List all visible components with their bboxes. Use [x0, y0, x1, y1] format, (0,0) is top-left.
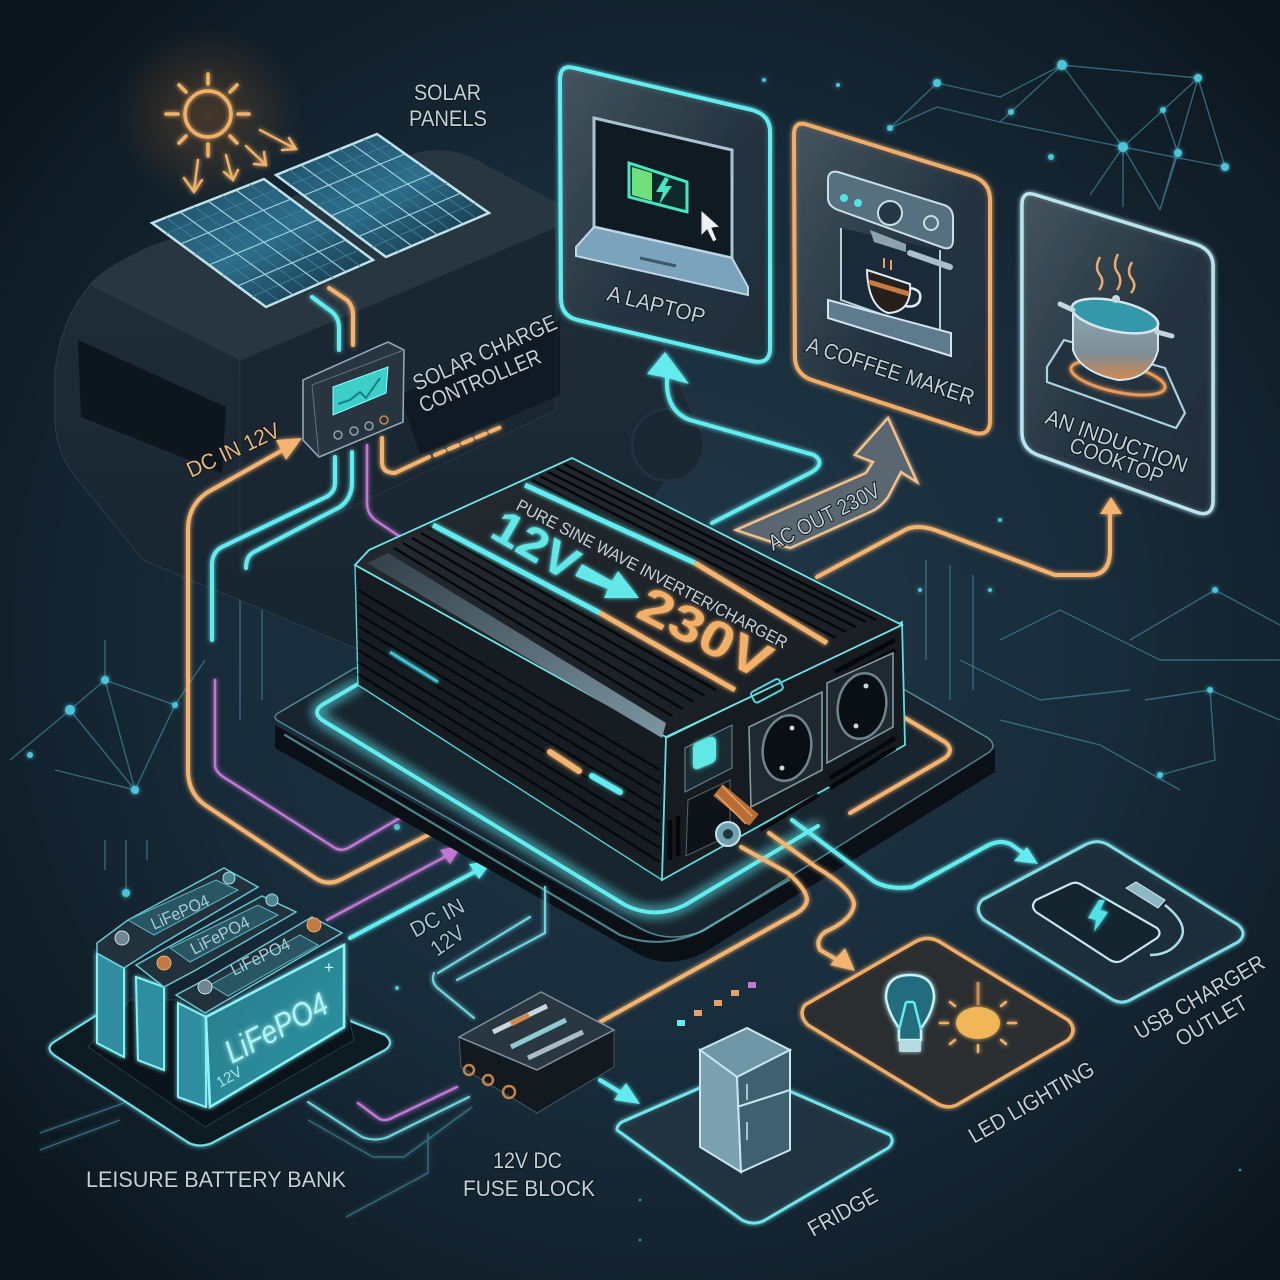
label: DC in 12V (controller): DC IN 12V — [183, 417, 284, 483]
label: 12V DC fuse block: 12V DC — [493, 1148, 562, 1173]
icon: espresso machine — [828, 172, 953, 356]
card: a laptop — [560, 67, 770, 362]
label: solar charge controller: CONTROLLER — [415, 344, 545, 418]
battery top labels: LiFePO4 — [227, 934, 293, 980]
base outer thin outline — [285, 735, 789, 942]
ribs rear band — [532, 464, 876, 638]
sun glow — [113, 25, 303, 205]
status indicator — [750, 678, 784, 704]
DC terminals — [686, 780, 754, 856]
base glow outline: orange — [850, 718, 950, 813]
battery voltage label: 12V — [214, 1063, 245, 1091]
inverter top — [355, 458, 902, 737]
pad: LED lighting — [802, 938, 1073, 1107]
fuse block — [459, 992, 614, 1113]
accent stripes — [433, 525, 600, 613]
inverter unit — [355, 458, 905, 880]
socket right — [827, 653, 893, 763]
label: DC in 12V (battery): DC IN — [406, 893, 469, 942]
power switch — [685, 725, 732, 792]
label: USB charger outlet: OUTLET — [1171, 990, 1252, 1051]
icon: LED spotlight — [940, 982, 1016, 1052]
icon: light bulb — [886, 975, 934, 1052]
solar panels — [152, 134, 489, 307]
van roof — [90, 151, 556, 360]
label: solar panels: PANELS — [409, 106, 487, 131]
vents — [670, 640, 895, 860]
inverter left side — [355, 565, 666, 880]
battery bank — [50, 868, 390, 1146]
card: a laptop: A LAPTOP — [605, 281, 708, 329]
arrow: 12V to 230V — [575, 564, 639, 598]
front battery: + — [324, 958, 334, 977]
arrow: AC out to coffee maker — [736, 418, 917, 548]
inverter base platform — [275, 668, 995, 962]
arrow: AC out to laptop — [647, 352, 820, 523]
inverter side lights — [390, 652, 620, 792]
label: solar charge controller: SOLAR CHARGE — [409, 310, 561, 396]
card: a coffee maker — [794, 124, 990, 434]
battery top labels: LiFePO4 — [148, 891, 212, 934]
label: leisure battery bank: LEISURE BATTERY BANK — [86, 1167, 346, 1192]
controller buttons — [334, 416, 388, 439]
socket left — [749, 692, 822, 807]
solar charge controller — [303, 342, 404, 457]
label: fridge: FRIDGE — [803, 1183, 882, 1241]
label: LED lighting: LED LIGHTING — [964, 1056, 1099, 1148]
right solar panel — [276, 134, 489, 257]
label: USB charger outlet: USB CHARGER — [1130, 950, 1269, 1044]
van dark label band — [400, 320, 560, 455]
back battery — [97, 868, 258, 1057]
fuses — [493, 1006, 583, 1058]
induction card label: AN INDUCTION — [1042, 404, 1191, 478]
label: DC in 12V (battery): 12V — [426, 920, 470, 961]
delivery van silhouette — [55, 151, 704, 650]
van rear panel — [240, 227, 556, 560]
wires: panels to controller — [312, 288, 353, 350]
ribs front band — [394, 528, 716, 716]
induction card label: COOKTOP — [1066, 432, 1167, 489]
label: solar panels — [409, 80, 487, 131]
icon: pot on cooktop — [1047, 254, 1185, 428]
middle battery — [136, 896, 296, 1070]
front battery — [176, 917, 344, 1107]
label: solar panels: SOLAR — [414, 80, 481, 105]
battery top labels — [148, 891, 293, 980]
wires: DC out to loads — [40, 820, 1038, 1217]
card: an induction cooktop — [1022, 194, 1213, 514]
battery main label: LiFePO4 — [218, 986, 334, 1070]
battery base outline — [50, 1015, 390, 1146]
indicator dots — [677, 982, 756, 1026]
van wheel — [632, 409, 704, 481]
inverter heading: PURE SINE WAVE INVERTER/CHARGER — [513, 496, 791, 652]
label: AC out 230V: AC OUT 230V — [764, 478, 884, 555]
icon: fridge — [700, 1028, 790, 1172]
base glow outline: cyan — [317, 684, 818, 912]
icon: sun with arrows — [166, 74, 296, 192]
wires: DC inputs and controller outputs — [188, 427, 501, 938]
pad: fridge — [617, 1028, 892, 1223]
label: 12V DC fuse block — [463, 1148, 595, 1201]
pad: USB charger outlet — [978, 842, 1243, 1002]
arrow: AC out to induction cooktop — [817, 497, 1122, 577]
label: 12V DC fuse block: FUSE BLOCK — [463, 1176, 595, 1201]
inverter right end — [662, 622, 905, 880]
icon: laptop with battery — [576, 118, 748, 295]
controller screen — [333, 367, 388, 415]
card: a coffee maker: A COFFEE MAKER — [803, 332, 978, 410]
grey band — [367, 553, 666, 738]
left solar panel — [152, 179, 373, 307]
icon: phone and USB cable — [1033, 882, 1183, 962]
van side window — [78, 340, 226, 473]
12V label: 12V — [483, 500, 589, 591]
battery top labels: LiFePO4 — [187, 913, 253, 959]
230V label: 230V — [629, 576, 782, 691]
battery terminals — [115, 872, 321, 994]
